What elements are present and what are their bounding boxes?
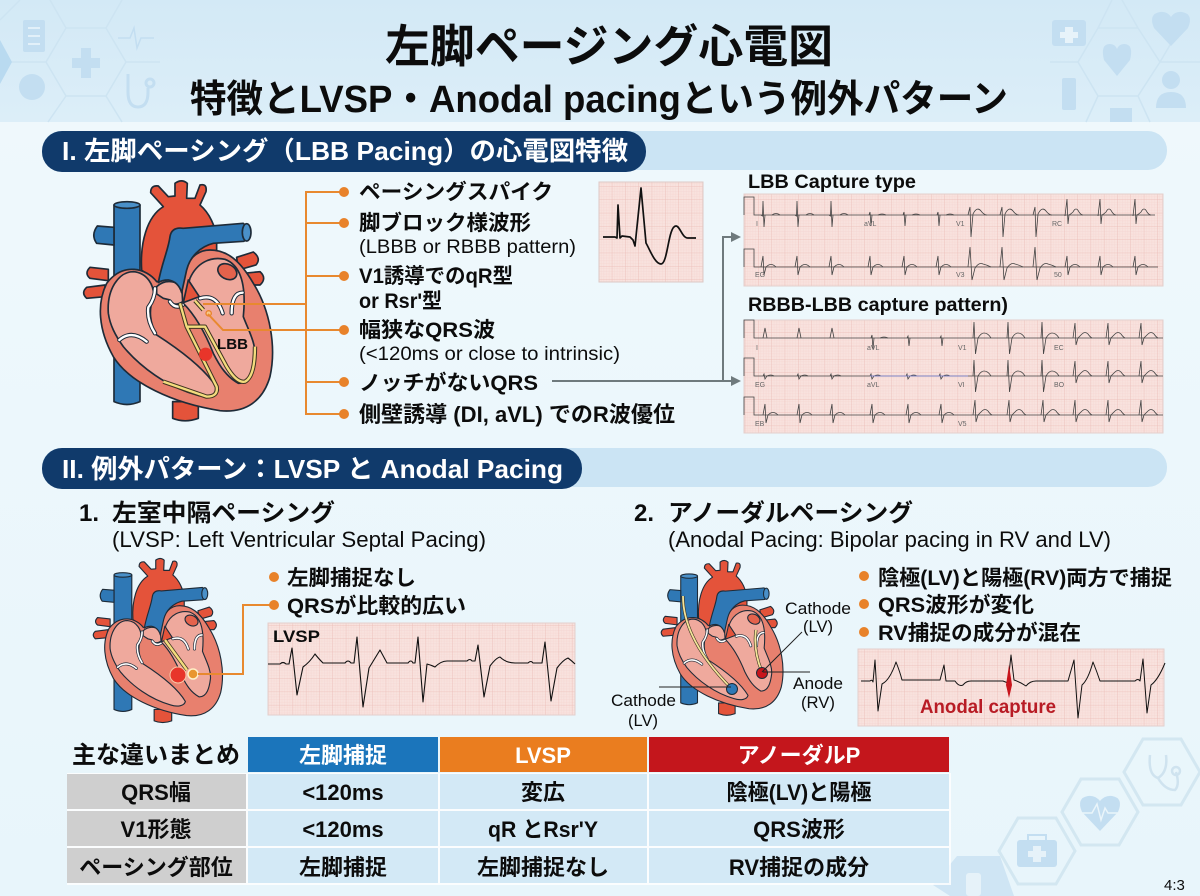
- anodal bullets: 陰極(LV)と陽極(RV)両方で捕捉: [878, 567, 1172, 590]
- table header: [248, 737, 949, 772]
- heart diagram: LBB pacing: [84, 181, 273, 421]
- ECG strip: LBB capture type: [744, 194, 1163, 286]
- anodal bullets: [859, 567, 1172, 645]
- table body: 左脚捕捉: [299, 855, 387, 880]
- table body: <120ms: [302, 817, 384, 842]
- anodal bullets: RV捕捉の成分が混在: [878, 621, 1081, 645]
- label: LBB capture type: LBB Capture type: [748, 172, 916, 193]
- feature list: V1誘導でのqR型: [359, 265, 513, 288]
- feature list: (<120ms or close to intrinsic): [359, 344, 620, 365]
- table title: 主な違いまとめ: [72, 742, 240, 769]
- grey arrows: [552, 232, 741, 386]
- ECG strip: RBBB-LBB capture pattern: V5: [958, 421, 967, 428]
- labels: cathode and anode: (LV): [803, 617, 833, 636]
- ECG strip: RBBB-LBB capture pattern: [744, 320, 1163, 433]
- ECG strip: RBBB-LBB capture pattern: EC: [1054, 345, 1064, 352]
- labels: cathode and anode: Anode: [793, 674, 843, 693]
- table body: <120ms: [302, 780, 384, 805]
- LVSP heading: [79, 499, 486, 552]
- feature list: or Rsr'型: [359, 290, 442, 313]
- table body: 左脚捕捉なし: [477, 855, 609, 880]
- ECG strip: RBBB-LBB capture pattern: BO: [1054, 382, 1065, 389]
- ECG strip: LBB capture type: aVL: [864, 221, 877, 228]
- table header: LVSP: [515, 743, 571, 768]
- table body: QRS波形: [753, 817, 845, 842]
- feature list: 幅狭なQRS波: [359, 319, 495, 342]
- table header: アノーダルP: [738, 743, 860, 768]
- labels: cathode and anode: Cathode: [785, 599, 851, 618]
- table body: 変広: [521, 780, 565, 805]
- LVSP bullets: 左脚捕捉なし: [287, 567, 416, 590]
- decorative medical icons: header left: [0, 0, 160, 122]
- ECG: anodal capture: Anodal capture: [920, 697, 1056, 718]
- Anodal heading: アノーダルペーシング: [668, 499, 913, 527]
- aspect ratio note: 4:3: [1164, 877, 1185, 894]
- feature list: ノッチがないQRS: [359, 371, 538, 395]
- LVSP heading: (LVSP: Left Ventricular Septal Pacing): [112, 527, 486, 552]
- feature list: 側壁誘導 (DI, aVL) でのR波優位: [359, 402, 675, 427]
- subtitle: 特徴とLVSP・Anodal pacingという例外パターン: [190, 79, 1008, 121]
- feature list: [359, 180, 675, 427]
- labels: cathode and anode: [611, 599, 851, 730]
- table body: [67, 773, 951, 885]
- header band: [0, 0, 1200, 122]
- LVSP heading: 左室中隔ペーシング: [112, 499, 335, 527]
- table body: RV捕捉の成分: [729, 855, 869, 880]
- feature list: (LBBB or RBBB pattern): [359, 237, 576, 258]
- decorative medical icons: bottom right: [933, 739, 1200, 896]
- Anodal heading: (Anodal Pacing: Bipolar pacing in RV and LV): [668, 527, 1111, 552]
- label: LBB: LBB: [217, 336, 248, 353]
- label: RBBB-LBB capture pattern: RBBB-LBB capture pattern): [748, 295, 1008, 316]
- section I heading bar: I. 左脚ペーシング（LBB Pacing）の心電図特徴: [62, 136, 628, 166]
- ECG strip: LBB capture type: RC: [1052, 221, 1062, 228]
- ECG strip: RBBB-LBB capture pattern: V1: [958, 345, 967, 352]
- title: 左脚ページング心電図: [385, 21, 833, 72]
- single beat ECG: [599, 182, 703, 282]
- ECG strip: RBBB-LBB capture pattern: VI: [958, 382, 965, 389]
- Anodal heading: [634, 499, 1111, 552]
- ECG strip: RBBB-LBB capture pattern: aVL: [867, 345, 880, 352]
- ECG strip: RBBB-LBB capture pattern: EG: [755, 382, 765, 389]
- anodal bullets: QRS波形が変化: [878, 593, 1034, 617]
- ECG strip: RBBB-LBB capture pattern: EB: [755, 421, 765, 428]
- ECG: anodal capture: [858, 649, 1165, 726]
- LVSP connector: [198, 605, 274, 674]
- heart diagram: LVSP: [93, 558, 222, 723]
- table body: ペーシング部位: [79, 855, 233, 880]
- ECG strip: LBB capture type: V1: [956, 221, 965, 228]
- feature list: ペーシングスパイク: [359, 180, 553, 204]
- labels: cathode and anode: Cathode: [611, 691, 676, 710]
- ECG: LVSP: [268, 623, 575, 715]
- ECG strip: LBB capture type: I: [756, 221, 758, 228]
- ECG strip: LBB capture type: V3: [956, 272, 965, 279]
- feature list: 脚ブロック様波形: [359, 211, 531, 235]
- table body: V1形態: [121, 817, 191, 842]
- decorative medical icons: header right: [1050, 0, 1200, 122]
- heart diagram: anodal pacing: [611, 560, 851, 730]
- ECG: LVSP: LVSP: [273, 627, 320, 646]
- table body: qR とRsr'Y: [488, 817, 598, 842]
- ECG strip: LBB capture type: 50: [1054, 272, 1062, 279]
- table header: 左脚捕捉: [299, 743, 387, 768]
- section I heading bar: [42, 131, 1167, 172]
- labels: cathode and anode: (LV): [628, 711, 658, 730]
- table body: QRS幅: [121, 780, 191, 805]
- ECG strip: RBBB-LBB capture pattern: I: [756, 345, 758, 352]
- LVSP heading: 1.: [79, 500, 99, 527]
- ECG strip: LBB capture type: EG: [755, 272, 765, 279]
- labels: cathode and anode: (RV): [801, 693, 835, 712]
- LVSP bullets: QRSが比較的広い: [287, 594, 466, 618]
- ECG strip: RBBB-LBB capture pattern: aVL: [867, 382, 880, 389]
- Anodal heading: 2.: [634, 500, 654, 527]
- table body: 陰極(LV)と陽極: [726, 780, 872, 805]
- LVSP bullets: [269, 567, 466, 618]
- orange connector tree: [203, 187, 349, 419]
- section II heading bar: II. 例外パターン：LVSP と Anodal Pacing: [62, 454, 563, 484]
- section II heading bar: [42, 448, 1167, 489]
- comparison table: [67, 737, 951, 885]
